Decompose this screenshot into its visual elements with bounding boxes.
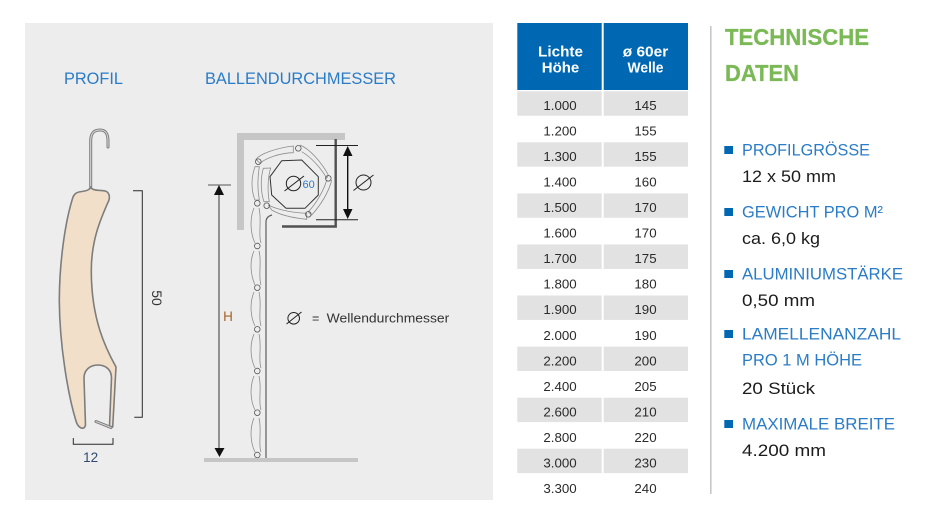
spec: Lamellenanzahl: PRO 1 M HÖHE — [742, 352, 862, 370]
table rows: values: 180 — [634, 277, 657, 292]
table rows: values: 1.900 — [543, 302, 577, 317]
table rows: values: 2.400 — [543, 379, 577, 394]
floor line — [204, 458, 358, 462]
divider line — [710, 26, 712, 494]
table rows: values: 2.600 — [543, 404, 577, 419]
table rows: values: 160 — [634, 175, 657, 190]
spec: Aluminiumstärke: ALUMINIUMSTÄRKE — [742, 266, 903, 284]
heading: Technische Daten: TECHNISCHE — [725, 24, 869, 50]
heading: Technische Daten: DATEN — [725, 60, 799, 86]
table rows: values: 200 — [634, 353, 657, 368]
heading: Ballendurchmesser: BALLENDURCHMESSER — [205, 70, 396, 88]
shaft octagon — [270, 160, 318, 208]
spec: Maximale Breite — [724, 416, 895, 460]
table header: Lichte Höhe: Höhe — [542, 60, 579, 76]
table rows: values: 2.800 — [543, 430, 577, 445]
table header: 60er Welle — [604, 23, 688, 90]
housing corner: dark bracket — [282, 139, 336, 226]
dimension: shaft diameter — [316, 146, 374, 220]
table rows: values — [543, 98, 657, 496]
spec: Profilgrösse: PROFILGRÖSSE — [742, 142, 870, 160]
table rows: values: 1.700 — [543, 251, 577, 266]
dimension: 12 — [73, 438, 113, 465]
table rows: values: 155 — [634, 149, 657, 164]
profile cross-section drawing — [59, 130, 116, 428]
shaft diameter label — [284, 176, 315, 191]
spec: Lamellenanzahl — [724, 326, 901, 398]
legend: diameter symbol: = — [312, 312, 319, 326]
table header: Lichte Höhe: Lichte — [538, 45, 583, 61]
table rows: values: 2.200 — [543, 353, 577, 368]
table rows: values: 190 — [634, 302, 657, 317]
table rows: values: 220 — [634, 430, 657, 445]
heading: Technische Daten — [725, 24, 869, 86]
legend: diameter symbol — [286, 312, 449, 326]
table rows: values: 3.000 — [543, 455, 577, 470]
table rows: values: 240 — [634, 481, 657, 496]
table rows: values: 1.800 — [543, 277, 577, 292]
spec: Gewicht — [724, 204, 883, 248]
spec: Lamellenanzahl: 20 Stück — [742, 380, 816, 398]
table header: 60er Welle: Welle — [628, 60, 664, 76]
table rows: values: 190 — [634, 328, 657, 343]
spec: Profilgrösse — [724, 142, 870, 186]
dimension: H — [208, 185, 233, 457]
table rows: values: 1.300 — [543, 149, 577, 164]
spec: Gewicht: GEWICHT PRO M² — [742, 204, 883, 222]
table rows: values: 170 — [634, 226, 657, 241]
spec: Aluminiumstärke — [724, 266, 903, 310]
table rows: values: 210 — [634, 404, 657, 419]
table rows: values: 205 — [634, 379, 657, 394]
table rows: values: 1.400 — [543, 175, 577, 190]
table rows: values: 3.300 — [543, 481, 577, 496]
table rows: values: 1.600 — [543, 226, 577, 241]
table header: 60er Welle: ø 60er — [623, 45, 669, 61]
spec: Lamellenanzahl: LAMELLENANZAHL — [742, 326, 901, 344]
spec: Maximale Breite: MAXIMALE BREITE — [742, 416, 895, 434]
panel: drawings background — [25, 23, 493, 500]
dimension: 12: 12 — [83, 450, 98, 465]
curtain guide line — [266, 215, 272, 458]
legend: diameter symbol: Wellendurchmesser — [327, 312, 449, 326]
dimension: 50 — [133, 191, 165, 417]
table header: Lichte Höhe — [517, 23, 602, 90]
spec: Maximale Breite: 4.200 mm — [742, 442, 826, 460]
housing corner: grey bracket — [237, 133, 345, 230]
spec: Aluminiumstärke: 0,50 mm — [742, 292, 815, 310]
table rows: values: 1.200 — [543, 124, 577, 138]
heading: Profil: PROFIL — [64, 70, 123, 88]
rolled curtain slats — [251, 145, 332, 458]
table rows: values: 1.500 — [543, 200, 577, 215]
shaft diameter label: 60 — [302, 179, 315, 191]
table rows: values: 230 — [634, 455, 657, 470]
table rows: values: 1.000 — [543, 98, 577, 113]
spec: Gewicht: ca. 6,0 kg — [742, 230, 820, 248]
table: shaft sizes — [517, 23, 688, 496]
table rows: values: 155 — [634, 124, 657, 138]
spec: Profilgrösse: 12 x 50 mm — [742, 168, 836, 186]
table rows: shading — [517, 91, 688, 473]
table rows: values: 2.000 — [543, 328, 577, 343]
dimension: H: H — [223, 309, 233, 324]
dimension: 50: 50 — [149, 290, 165, 306]
table rows: values: 170 — [634, 200, 657, 215]
table rows: values: 145 — [634, 98, 657, 113]
table rows: values: 175 — [634, 251, 657, 266]
